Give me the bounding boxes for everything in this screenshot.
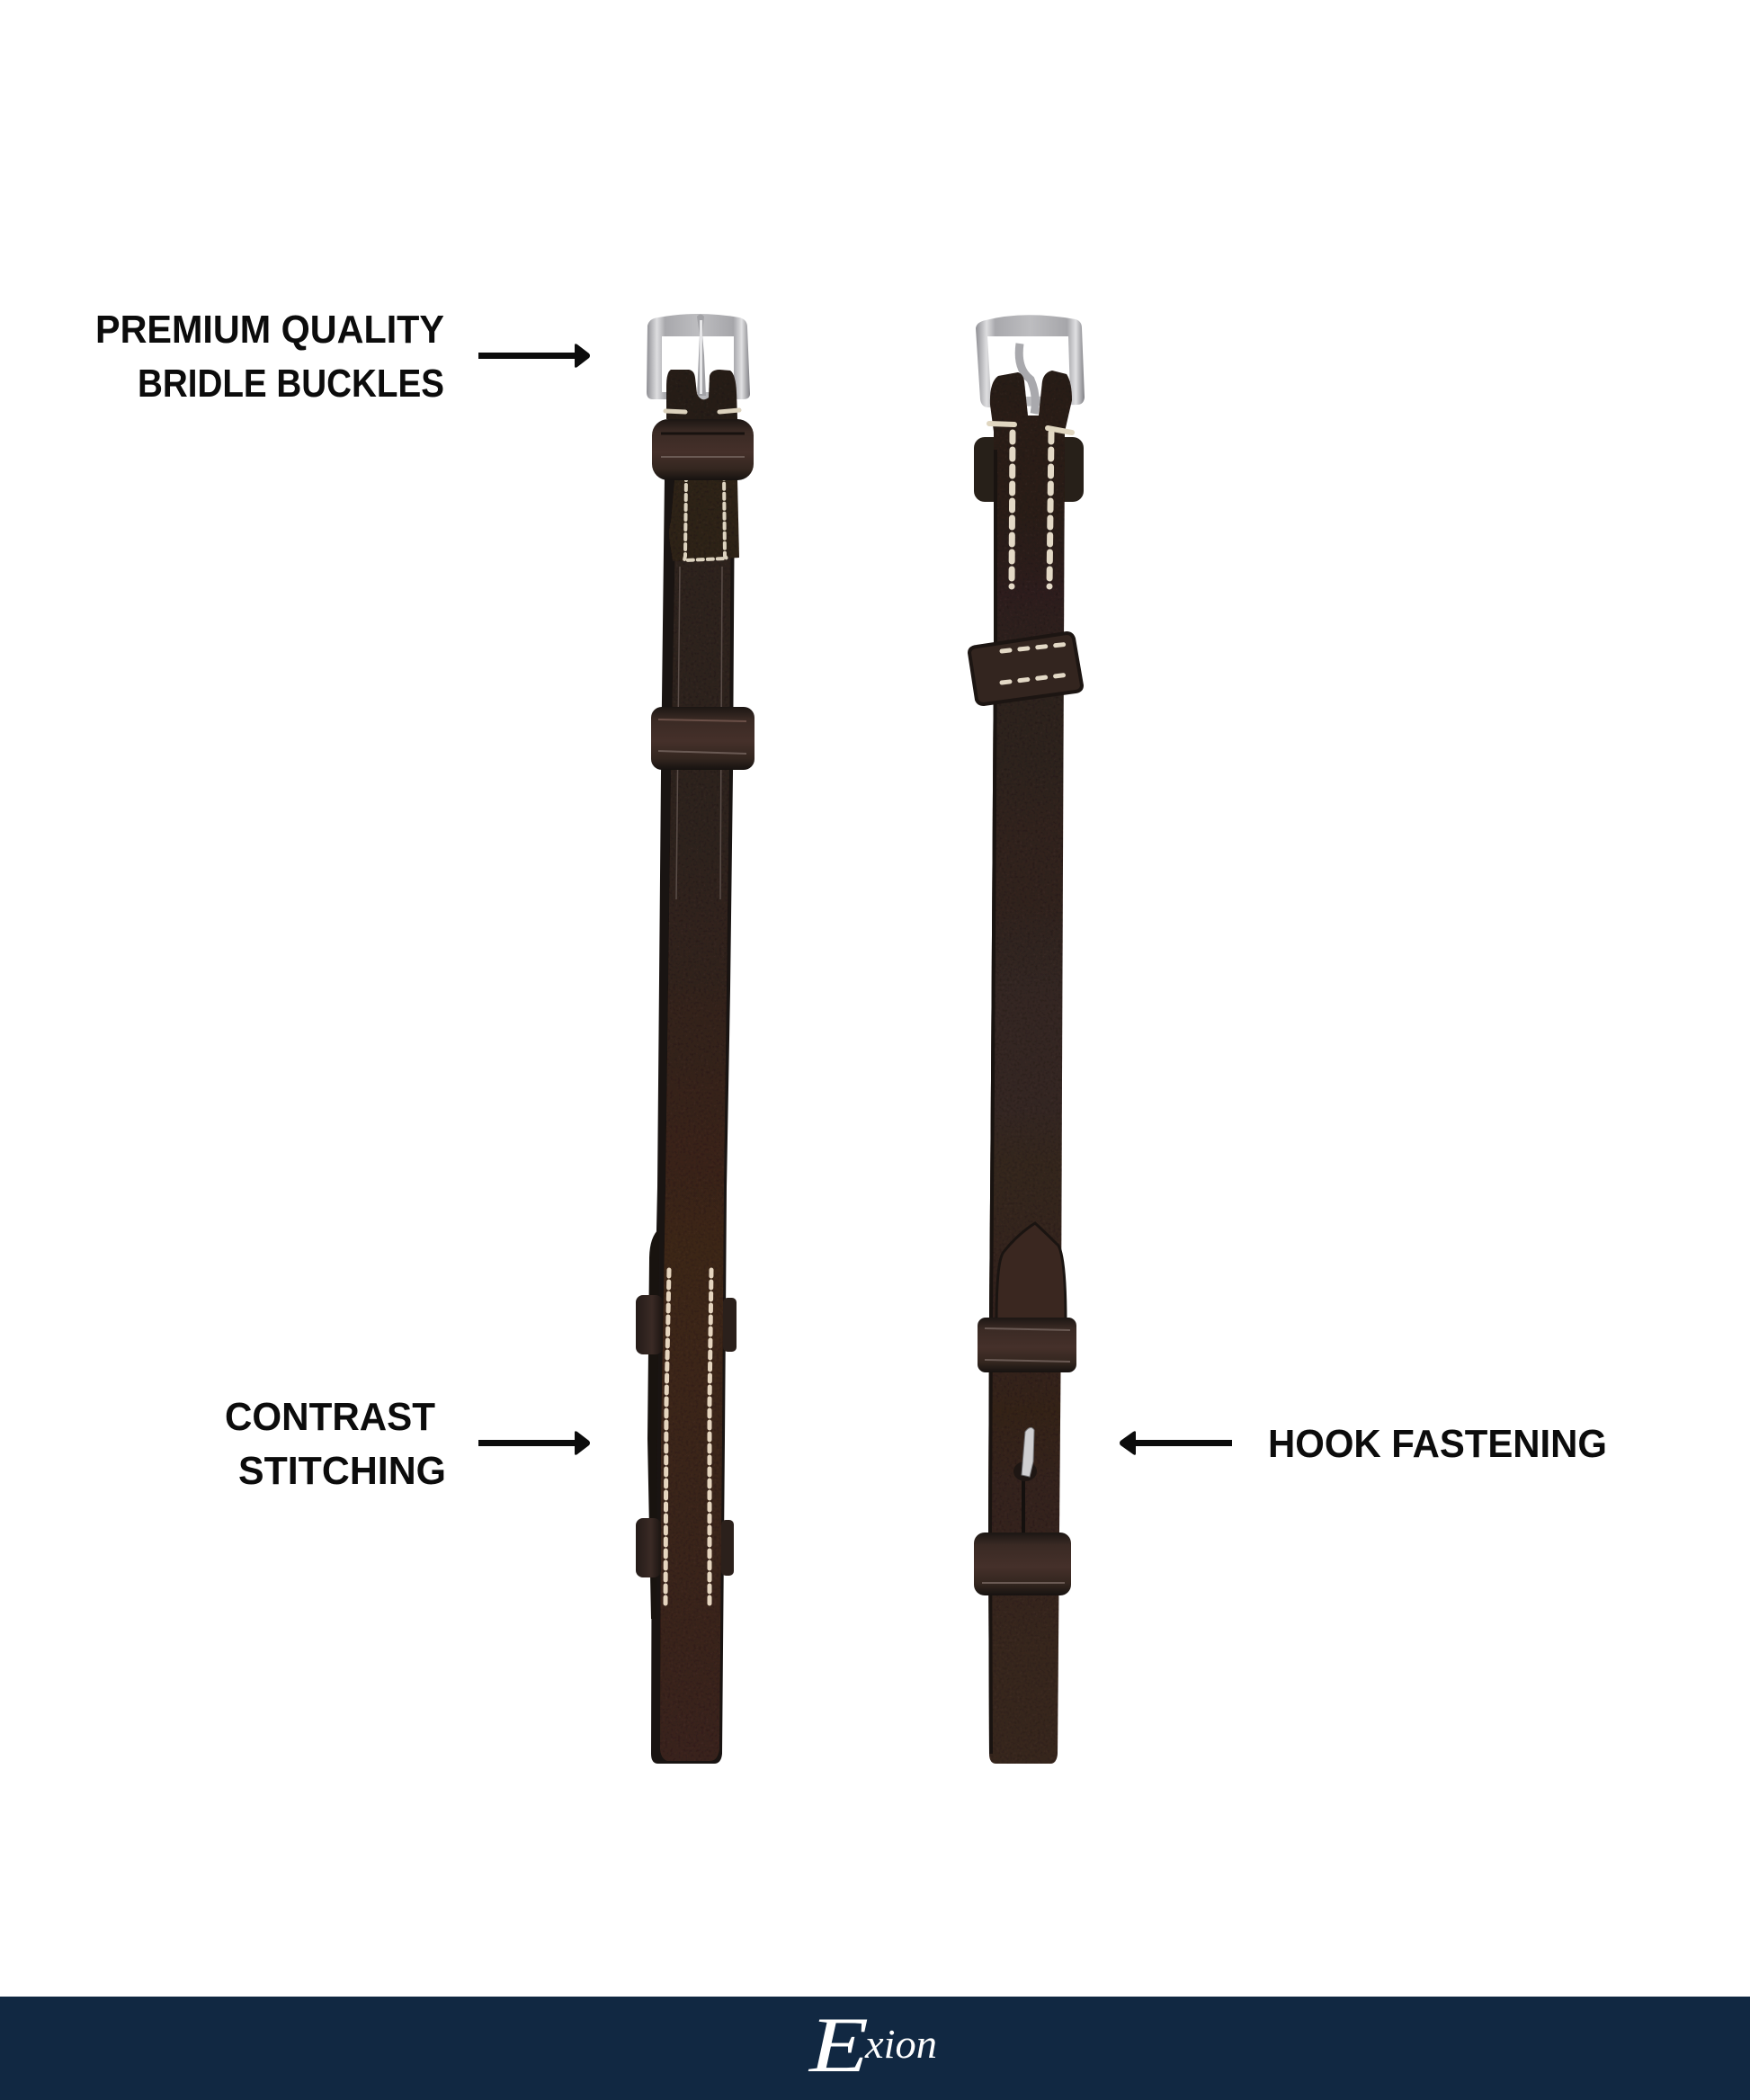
logo: E bbox=[808, 2002, 869, 2089]
backing edge bbox=[647, 1229, 659, 1619]
patch stitches bbox=[684, 475, 727, 560]
keeper B bbox=[974, 1533, 1071, 1595]
tilted keeper bbox=[969, 633, 1082, 704]
arrow: stitching bbox=[478, 1431, 590, 1455]
buckle tab bbox=[666, 370, 737, 419]
icon: left buckle bbox=[647, 314, 750, 399]
top threads bbox=[989, 424, 1072, 433]
icon: hook fastening bbox=[1022, 1427, 1034, 1477]
label: contrast stitching: CONTRAST bbox=[225, 1395, 435, 1439]
lower loop 1 bbox=[636, 1295, 737, 1354]
keeper A bbox=[978, 1318, 1076, 1372]
strap edge shading bbox=[990, 450, 996, 1754]
label: premium quality bridle buckles: BRIDLE BUCKLES bbox=[138, 362, 444, 406]
logo bbox=[808, 2002, 937, 2089]
strap front face bbox=[660, 477, 731, 1761]
pointed tip bbox=[996, 1223, 1066, 1322]
strap body bbox=[988, 371, 1072, 1764]
label: hook fastening: HOOK FASTENING bbox=[1268, 1422, 1607, 1466]
tab threads bbox=[665, 410, 739, 412]
stitched top patch bbox=[669, 480, 739, 561]
keeper 1 bbox=[652, 419, 754, 480]
keeper 2 bbox=[651, 707, 754, 770]
upper stitching bbox=[1012, 433, 1051, 586]
label: contrast stitching: STITCHING bbox=[238, 1449, 446, 1493]
icon: right buckle bbox=[976, 315, 1085, 414]
arrow: hook fastening bbox=[1120, 1431, 1232, 1455]
right strap bbox=[969, 315, 1085, 1764]
label: premium quality bridle buckles: PREMIUM QUALITY bbox=[95, 308, 444, 352]
lower loop 2 bbox=[636, 1518, 734, 1577]
back keeper bbox=[974, 437, 1084, 502]
logo: xion bbox=[864, 2021, 937, 2067]
contrast stitching bbox=[665, 1270, 711, 1606]
hook slit bbox=[1013, 1461, 1037, 1546]
left strap bbox=[636, 314, 754, 1764]
arrow: buckle bbox=[478, 344, 590, 368]
upper strap body bbox=[651, 477, 735, 1764]
crease lines bbox=[676, 567, 722, 899]
footer band bbox=[0, 1997, 1750, 2100]
